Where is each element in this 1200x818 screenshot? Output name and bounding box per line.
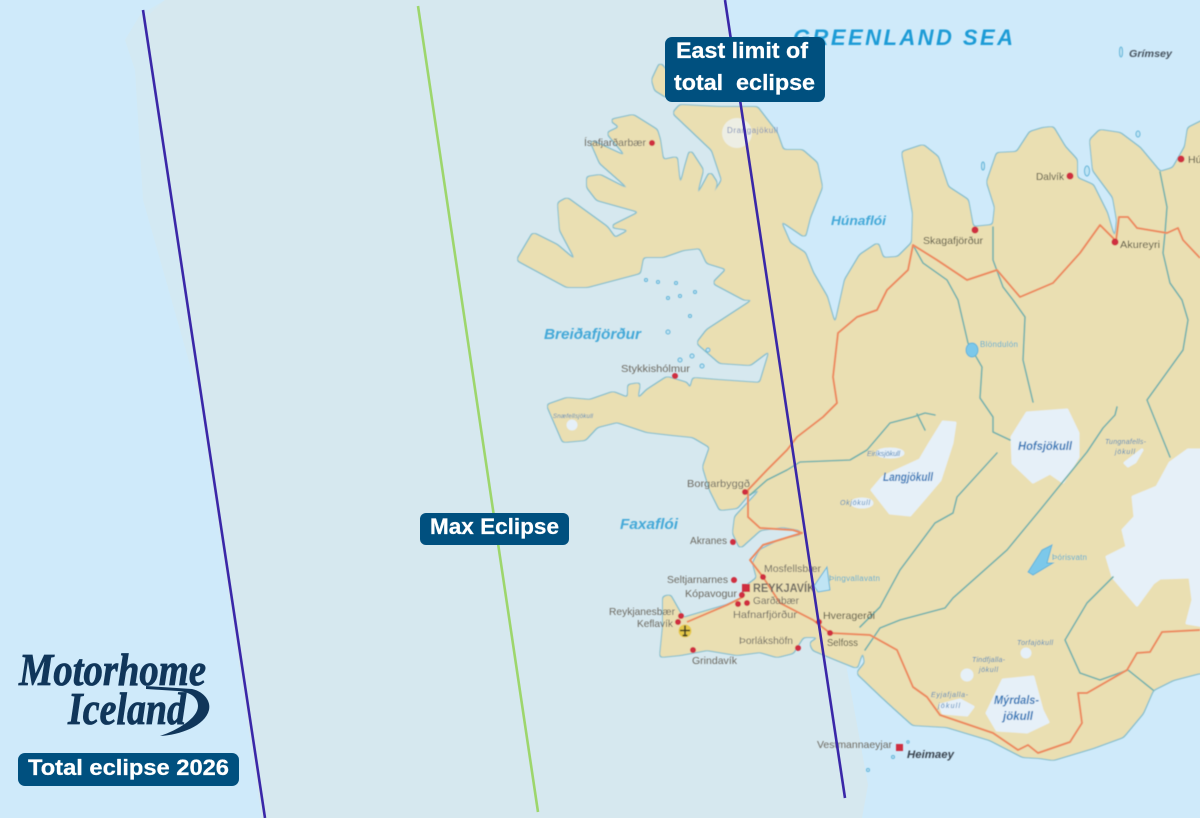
place names: Hveragerði <box>823 610 875 622</box>
logo: Motorhome Iceland <box>18 644 209 736</box>
place names: Borgarbyggð <box>687 478 750 490</box>
sea labels: Húnaflói <box>831 213 886 228</box>
logo: Motorhome Iceland: Iceland <box>67 683 187 734</box>
place names: Akranes <box>690 535 727 547</box>
callout: east limit of total eclipse <box>665 37 825 102</box>
glaciers <box>568 118 1200 732</box>
logo: Motorhome Iceland: Motorhome <box>18 644 206 695</box>
lakes and islands <box>644 47 1140 772</box>
callout: max eclipse <box>420 513 569 545</box>
Hofsjökull <box>1012 410 1078 482</box>
place names: Keflavík <box>637 618 674 630</box>
place names: Dalvík <box>1036 171 1065 183</box>
faint fringe of the washed-out band <box>125 0 262 818</box>
place names: Reykjanesbær <box>609 606 675 618</box>
glacier and lake names: jökull <box>1001 709 1034 723</box>
place names: Skagafjörður <box>923 235 983 247</box>
place names: REYKJAVÍK <box>753 580 815 595</box>
glacier and lake names: jökull <box>1114 449 1135 456</box>
place names: Vestmannaeyjar <box>817 739 892 751</box>
Mýrdalsjökull <box>987 677 1048 732</box>
place names: Garðabær <box>753 595 799 607</box>
roads <box>687 217 1200 753</box>
place names: Kópavogur <box>685 588 738 600</box>
place names: Heimaey <box>907 749 955 761</box>
glacier and lake names: Torfajökull <box>1017 640 1053 647</box>
place names: Ísafjarðarbær <box>584 136 646 149</box>
glacier and lake names: Eiríksjökull <box>867 451 900 458</box>
place names: Seltjarnarnes <box>667 574 728 586</box>
badge: total eclipse 2026: Total eclipse 2026 <box>28 755 229 780</box>
glacier and lake names: Mýrdals- <box>994 693 1039 707</box>
glacier and lake names: jökull <box>937 703 960 710</box>
glacier and lake names <box>553 126 1147 723</box>
sea labels <box>544 25 1013 533</box>
Langjökull <box>872 422 955 515</box>
place dots <box>649 140 1184 751</box>
place names: Hafnarfjörður <box>733 609 798 621</box>
sea labels: Breiðafjörður <box>544 326 642 343</box>
glacier and lake names: Tungnafells- <box>1105 439 1147 446</box>
place names: Stykkishólmur <box>621 363 691 375</box>
place names: Mosfellsbær <box>764 563 821 575</box>
washed-out band of the totality path <box>143 0 868 818</box>
place names: Selfoss <box>827 637 858 649</box>
glacier and lake names: Blöndulón <box>980 340 1018 349</box>
small ice caps <box>568 118 1142 680</box>
place names: Grímsey <box>1129 49 1172 60</box>
badge: total eclipse 2026 <box>18 753 239 786</box>
rivers <box>750 172 1188 690</box>
east limit line of totality <box>725 0 845 798</box>
callout: east limit of total eclipse: East limit of <box>676 38 809 63</box>
west limit line of totality <box>143 10 265 818</box>
sea labels: GREENLAND SEA <box>793 25 1013 50</box>
place names: Akureyri <box>1120 239 1160 251</box>
glacier and lake names: Snæfellsjökull <box>553 414 594 420</box>
place names: Þorlákshöfn <box>739 635 793 647</box>
glacier and lake names: Drangajökull <box>727 126 778 135</box>
Vatnajökull <box>1107 450 1200 627</box>
map of west Iceland <box>517 25 1200 772</box>
glacier and lake names: Tindfjalla- <box>972 657 1006 664</box>
glacier and lake names: Langjökull <box>883 470 934 484</box>
glacier and lake names: Hofsjökull <box>1018 439 1073 453</box>
logo swoosh <box>146 686 209 736</box>
sea labels: Faxaflói <box>620 516 679 533</box>
place names <box>584 49 1200 761</box>
glacier and lake names: Eyjafjalla- <box>931 692 969 699</box>
glacier and lake names: Þingvallavatn <box>829 574 880 583</box>
glacier and lake names: jökull <box>978 667 998 674</box>
max eclipse centre line <box>418 6 538 812</box>
callout: max eclipse: Max Eclipse <box>430 514 559 539</box>
callout: east limit of total eclipse: total eclipse <box>674 70 815 95</box>
glacier and lake names: Okjökull <box>840 500 870 507</box>
glacier and lake names: Þórisvatn <box>1052 553 1087 562</box>
land mass <box>517 63 1200 760</box>
icon: airport <box>678 624 692 638</box>
Eyjafjallajökull <box>940 700 973 715</box>
place names: Grindavík <box>692 655 738 667</box>
